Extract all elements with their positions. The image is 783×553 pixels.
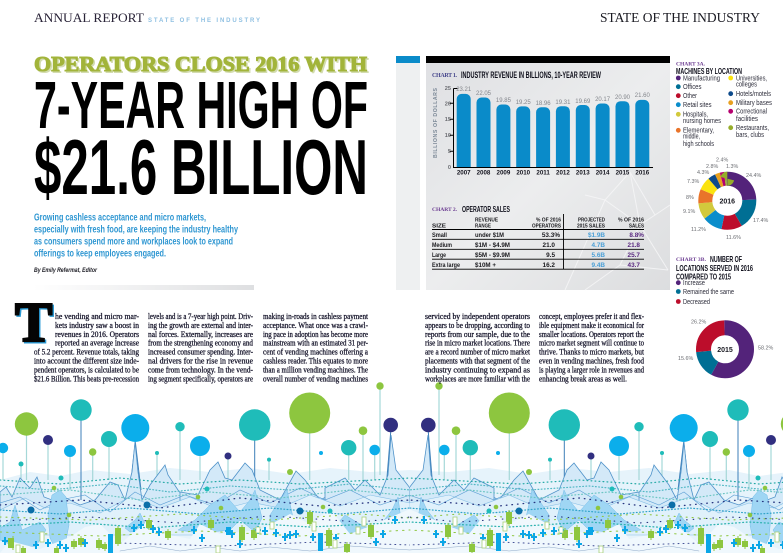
background illustration: bubbles and market charts <box>0 382 783 553</box>
year labels: 2015 <box>616 170 630 176</box>
value labels: 19.69 <box>575 99 591 105</box>
chart 3b: locations served <box>676 254 773 371</box>
table rules <box>432 214 644 270</box>
year labels: 2014 <box>596 170 610 176</box>
column 1: revenues in 2016. Operators <box>55 330 139 339</box>
table header: 2015 SALES <box>577 224 605 230</box>
y axis labels <box>445 86 451 171</box>
chart 3b legend: Increase <box>683 280 705 287</box>
table rows: $5M - $9.9M <box>475 252 510 259</box>
axes <box>450 88 653 168</box>
chart 3b donut center label: 2015 <box>717 347 733 354</box>
chart 3a legend: bars, clubs <box>736 132 764 139</box>
chart 3a legend: Hospitals, <box>683 112 708 119</box>
chart 3b heading: COMPARED TO 2015 <box>676 272 731 282</box>
chart 3a percentages: 2.8% <box>706 164 718 170</box>
column 2: increased consumer spending. Inter- <box>148 348 253 357</box>
column 1: he vending and micro mar- <box>55 312 139 321</box>
kicker headline: OPERATORS CLOSE 2016 WITH <box>34 52 367 76</box>
chart 3a percentages <box>683 158 768 241</box>
column 3: cent of vending machines offering a <box>263 348 368 357</box>
chart 3a legend: Universities, <box>736 75 767 82</box>
table header: SIZE <box>432 224 446 230</box>
chart 3a percentages: 11.2% <box>691 227 706 233</box>
chart 3a legend: facilities <box>736 116 758 123</box>
deck paragraph: offerings to keep employees engaged. <box>34 248 166 260</box>
year labels: 2010 <box>516 170 531 176</box>
column 2: ing the growth are external and inter- <box>148 321 253 330</box>
table rows: 8.8% <box>629 232 644 239</box>
chart 3b heading: NUMBER OF <box>710 254 742 264</box>
table header: REVENUE <box>475 218 498 224</box>
chart 3a heading: MACHINES BY LOCATION <box>676 66 742 76</box>
chart 3a donut <box>705 179 749 223</box>
table header <box>432 218 645 230</box>
chart 3a heading <box>676 62 742 76</box>
chart 3a legend: nursing homes <box>683 118 721 125</box>
column 4 <box>425 312 531 383</box>
table rows: Large <box>432 252 446 259</box>
chart 3b percentages: 26.2% <box>691 320 706 326</box>
value labels: 18.96 <box>536 101 551 107</box>
chart 3b donut <box>704 328 746 371</box>
chart 3a legend: Elementary, <box>683 128 714 135</box>
chart 3a legend: colleges <box>736 81 757 88</box>
column 3: acceptance. What once was a crawl- <box>263 321 368 330</box>
table rows: 9.4B <box>592 262 605 269</box>
column 4: industry continuing to expand as <box>425 366 530 374</box>
chart 3a percentages: 1.3% <box>726 164 738 170</box>
running header left <box>34 11 260 25</box>
column 2: come from technology. In the vend- <box>148 366 253 374</box>
year labels: 2009 <box>497 170 511 176</box>
column 1: kets industry saw a boost in <box>55 321 140 330</box>
gradient rule under byline <box>33 285 254 290</box>
table header: % OF 2016 <box>618 218 645 224</box>
column 4: placements with that segment of the <box>425 357 530 366</box>
column 2: ing segment specifically, operators are <box>148 374 253 383</box>
chart 3a percentages: 17.4% <box>753 218 768 224</box>
chart 3a legend: Restaurants, <box>736 125 769 132</box>
column 4: appears to be dropping, according to <box>425 321 530 330</box>
column 2: from the strengthening economy and <box>148 339 254 348</box>
column 4: serviced by independent operators <box>425 312 530 321</box>
chart 3a percentages: 2.4% <box>716 158 728 164</box>
chart 3b heading: CHART 3B. <box>676 257 707 263</box>
chart 3a percentages: 24.4% <box>746 173 761 179</box>
table header: OPERATORS <box>532 224 561 230</box>
value labels: 23.21 <box>456 87 472 93</box>
column 3: mainstream with an estimated 31 per- <box>263 339 368 348</box>
value labels: 21.60 <box>635 93 650 99</box>
table rows: 5.6B <box>592 252 605 259</box>
table rows: Extra large <box>432 262 460 269</box>
year labels: 2013 <box>576 170 590 176</box>
table rows: 9.5 <box>546 252 555 259</box>
main headline: $21.6 BILLION <box>34 123 368 211</box>
chart 3a heading: CHART 3A. <box>676 62 706 68</box>
column 5: ible equipment make it economical for <box>539 321 644 330</box>
left accent strip <box>396 56 420 290</box>
table rows: $10M + <box>475 262 496 269</box>
value labels: 20.17 <box>595 97 611 103</box>
value labels: 22.05 <box>476 91 492 97</box>
y axis title: BILLIONS OF DOLLARS <box>433 87 439 158</box>
year labels: 2012 <box>556 170 570 176</box>
value labels: 19.85 <box>496 98 512 104</box>
chart 3b heading <box>676 254 753 282</box>
deck paragraph: Growing cashless acceptance and micro markets, <box>34 212 206 224</box>
chart 3a percentages: 11.6% <box>726 235 741 241</box>
y axis labels: 25 <box>445 86 451 92</box>
value labels: 19.31 <box>555 100 571 106</box>
chart 1 title <box>432 70 601 80</box>
year labels <box>457 170 650 176</box>
table header: % OF 2016 <box>536 218 562 224</box>
chart 3b legend: Remained the same <box>683 289 734 296</box>
table rows: Small <box>432 232 447 239</box>
column 4: workplaces are more familiar with the <box>425 374 530 383</box>
table title: OPERATOR SALES <box>462 204 510 214</box>
column 1: pendent operators, is calculated to be <box>34 366 139 374</box>
column 5: even in vending machines, fresh food <box>539 357 645 366</box>
column 3: overall number of vending machines <box>263 374 368 383</box>
table header: SALES <box>629 224 644 230</box>
main headline <box>34 68 368 211</box>
table header: RANGE <box>475 224 491 230</box>
deck paragraph <box>34 212 238 260</box>
kicker headline: OPERATORS CLOSE 2016 WITH <box>36 54 368 78</box>
column 4: are a record number of micro market <box>425 348 531 357</box>
byline: By Emily Refermat, Editor <box>34 268 98 274</box>
table rows: 16.2 <box>543 262 555 269</box>
column 2: nal forces. Externally, increases are <box>148 330 253 339</box>
chart 3b percentages: 58.2% <box>758 346 773 352</box>
column 2: levels and is a 7-year high point. Driv- <box>148 312 253 321</box>
panel: charts background <box>426 56 670 290</box>
chart 3b percentages <box>678 320 773 362</box>
column 2: nal drivers for the rise in revenue <box>148 357 253 366</box>
column 3: ing pace in adoption has become more <box>263 330 368 339</box>
year labels: 2007 <box>457 170 471 176</box>
chart 3a percentages: 9.1% <box>683 209 695 215</box>
column 4: rise in micro market locations. There <box>425 339 530 348</box>
chart 3a: machines by location <box>676 62 772 241</box>
table rows: 25.7 <box>628 252 640 259</box>
deck paragraph: as consumers spend more and workplaces look to expand <box>34 236 233 248</box>
table rows: under $1M <box>475 232 504 239</box>
table title: CHART 2. <box>432 207 458 213</box>
chart 3a percentages: 7.3% <box>687 179 699 185</box>
column 1: reported an average increase <box>55 339 139 348</box>
y axis labels: 10 <box>445 133 451 139</box>
column 1: into account the different size inde- <box>34 357 139 366</box>
chart 3b legend <box>676 280 734 306</box>
y axis labels: 20 <box>445 102 451 108</box>
bars <box>457 94 649 167</box>
table rows <box>432 232 644 269</box>
chart 3a legend: high schools <box>683 141 714 148</box>
article body text <box>34 312 645 383</box>
table rows: 4.7B <box>592 242 605 249</box>
drop cap T: T <box>16 294 54 356</box>
chart 3b legend: Decreased <box>683 299 710 306</box>
column 2 <box>148 312 254 383</box>
table rows: $1M - $4.9M <box>475 242 510 249</box>
table header: PROJECTED <box>578 218 605 224</box>
chart 3a donut center label: 2016 <box>720 198 735 205</box>
column 5: micro market segment will continue to <box>539 339 644 348</box>
column 4: reports from our sample, due to the <box>425 330 530 339</box>
column 1: of 5.2 percent. Revenue totals, taking <box>34 348 140 357</box>
value labels: 20.90 <box>615 95 631 101</box>
year labels: 2011 <box>536 170 550 176</box>
chart 3a legend: Other <box>683 93 698 100</box>
table title <box>432 204 510 214</box>
chart 3a legend: Correctional <box>736 109 767 116</box>
column 5: concept, employees prefer it and flex- <box>539 312 644 321</box>
running header left: ANNUAL REPORT <box>34 11 144 25</box>
chart 3a legend: middle, <box>683 134 700 141</box>
chart 3a legend: Retail sites <box>683 102 712 109</box>
chart 2: operator sales table <box>432 204 645 270</box>
column 1: $21.6 Billion. This beats pre-recession <box>34 374 140 383</box>
y axis labels: 5 <box>448 149 451 155</box>
table rows: 53.3% <box>542 232 560 239</box>
chart 1 title: INDUSTRY REVENUE IN BILLIONS, 10-YEAR REVIEW <box>461 70 601 80</box>
main headline: 7-YEAR HIGH OF <box>34 68 368 143</box>
chart 3a percentages: 8% <box>686 195 694 201</box>
column 5: is playing a larger role in revenues and <box>539 366 645 374</box>
column 1 <box>34 312 140 383</box>
column 3: cashless reader. This equates to more <box>263 357 368 366</box>
table rows: 21.0 <box>543 242 555 249</box>
table rows: $1.9B <box>588 232 605 239</box>
y axis labels: 15 <box>445 117 451 123</box>
deck paragraph: especially with fresh food, are keeping the industry healthy <box>34 224 238 236</box>
column 3: than a million vending machines. The <box>263 366 368 374</box>
chart 3a legend <box>676 75 772 148</box>
running header left: STATE OF THE INDUSTRY <box>148 18 260 24</box>
chart 1 title: CHART 1. <box>432 73 458 79</box>
column 5: enhancing break areas as well. <box>539 374 627 383</box>
column 3 <box>263 312 369 383</box>
chart 3a legend: Offices <box>683 84 702 91</box>
drop cap T: T <box>15 292 52 354</box>
y axis labels: 0 <box>448 165 451 171</box>
year labels: 2008 <box>477 170 491 176</box>
column 5 <box>539 312 645 383</box>
column 3: making in-roads in cashless payment <box>263 312 369 321</box>
column 5: thrive. Thanks to micro markets, but <box>539 348 645 357</box>
table rows: 21.8 <box>628 242 640 249</box>
chart 3a legend: Military bases <box>736 100 772 107</box>
column 5: smaller locations. Operators report the <box>539 330 644 339</box>
value labels <box>456 87 650 107</box>
value labels: 19.25 <box>516 100 531 106</box>
running header right: STATE OF THE INDUSTRY <box>600 10 760 25</box>
table rows: Medium <box>432 242 452 249</box>
chart 3a percentages: 4.3% <box>697 170 709 176</box>
chart 3a legend: Manufacturing <box>683 75 720 82</box>
chart 3b percentages: 15.6% <box>678 356 693 362</box>
table rows: 43.7 <box>628 262 640 269</box>
chart 3a legend: Hotels/motels <box>736 91 771 98</box>
year labels: 2016 <box>635 170 650 176</box>
chart 1: industry revenue bar chart <box>432 70 653 176</box>
